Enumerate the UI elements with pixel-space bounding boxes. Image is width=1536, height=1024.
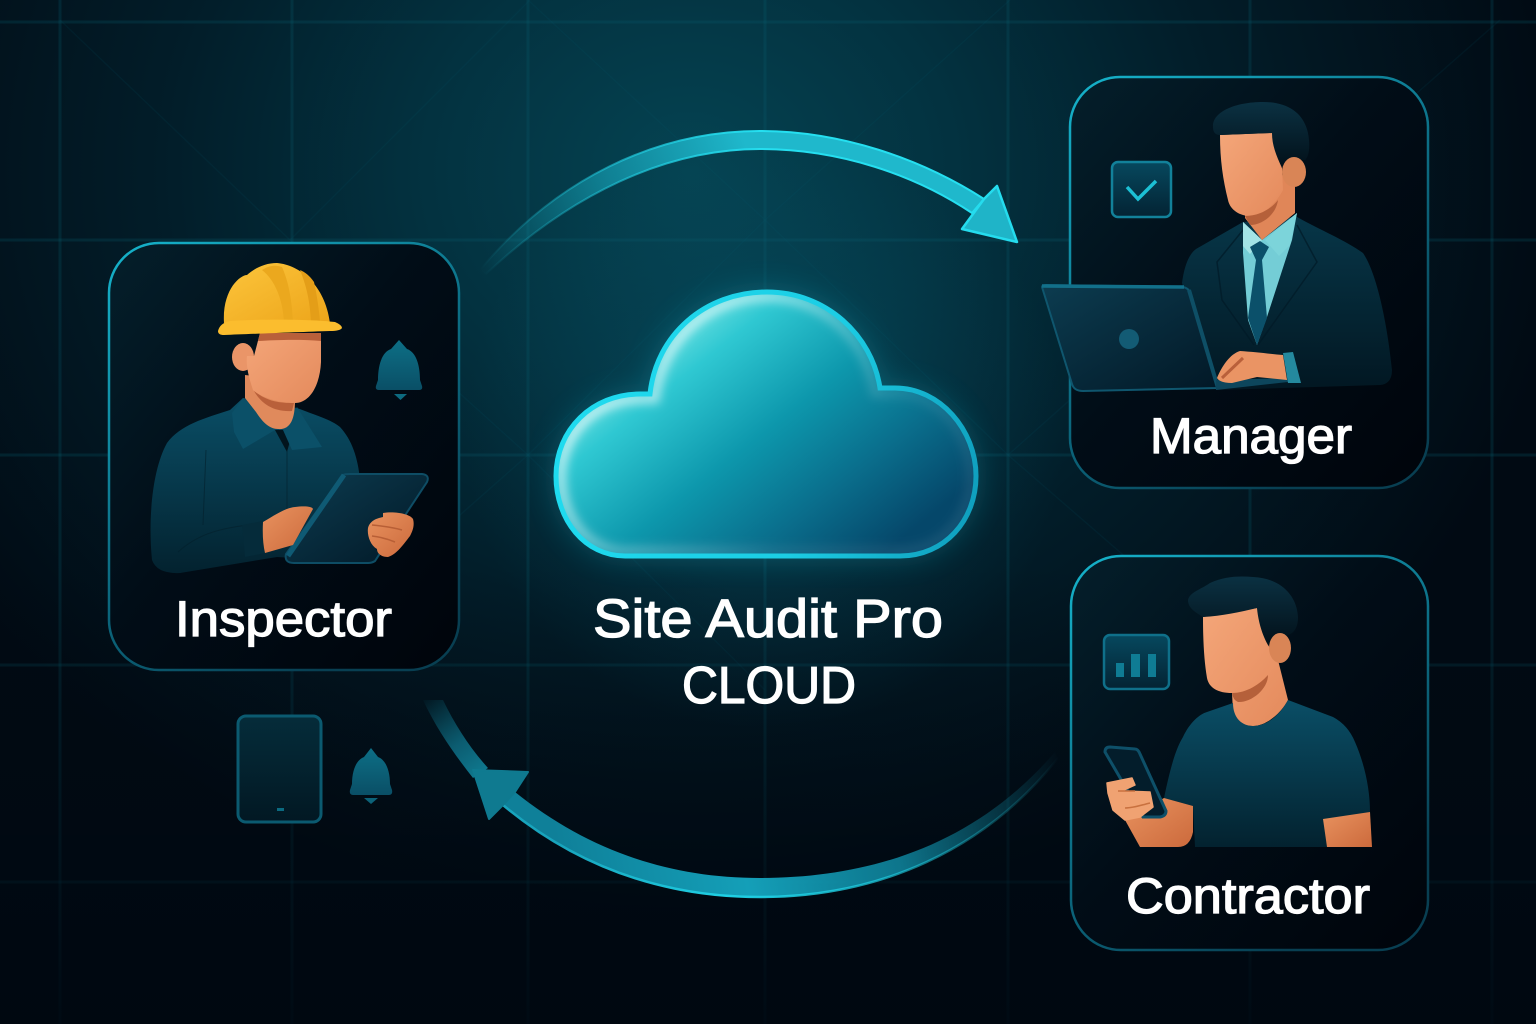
figure: inspector worker: [151, 263, 428, 573]
manager suit: [1182, 217, 1392, 390]
contractor t-shirt: [1164, 700, 1370, 847]
shirt and collar: [1243, 213, 1297, 345]
icon: bar chart tile: [1104, 635, 1169, 689]
worker ear: [232, 343, 254, 371]
manager hand: [1217, 351, 1287, 383]
figure: contractor with phone: [1105, 577, 1372, 847]
arrow: cloud sync from inspector to manager: [480, 131, 1017, 274]
contractor hand: [1107, 778, 1153, 820]
hard hat: [224, 263, 330, 323]
label: Contractor: Contractor: [1126, 868, 1370, 924]
contractor ear: [1269, 633, 1291, 663]
label: Inspector: Inspector: [175, 591, 392, 647]
contractor neck and face: [1203, 608, 1288, 726]
panel: inspector: [109, 243, 459, 670]
worker left hand: [263, 506, 313, 553]
heading: Site Audit Pro CLOUD: Site Audit Pro: [593, 589, 943, 649]
manager cuff: [1283, 352, 1301, 383]
laptop: [1042, 285, 1218, 391]
contractor left arm: [1125, 798, 1193, 847]
label: Manager: Manager: [1150, 408, 1352, 464]
worker shirt: [151, 398, 360, 573]
phone: [1105, 747, 1166, 817]
heading: Site Audit Pro CLOUD: CLOUD: [682, 657, 856, 715]
manager neck: [1245, 165, 1295, 240]
worker right hand: [368, 512, 414, 557]
figure: manager in suit: [1042, 102, 1392, 391]
icon: standalone bell: [350, 748, 392, 804]
worker cuff: [242, 521, 265, 557]
manager ear: [1282, 157, 1306, 187]
heading: Site Audit Pro CLOUD: [593, 589, 943, 715]
manager face: [1220, 133, 1283, 216]
arrow: contractor back to inspector: [423, 700, 1058, 897]
contractor hair: [1188, 577, 1298, 645]
icon: checkbox: [1112, 162, 1171, 217]
panel: manager: [1042, 77, 1428, 488]
worker neck: [245, 375, 295, 429]
tie: [1248, 241, 1269, 345]
contractor right arm: [1323, 812, 1372, 847]
panel: contractor: [1071, 556, 1428, 950]
icon: central cloud: [556, 292, 976, 556]
icon: standalone tablet: [238, 716, 321, 822]
tablet: [286, 474, 428, 563]
manager hair: [1213, 102, 1309, 168]
icon: inspector bell: [376, 340, 422, 400]
worker face: [247, 333, 321, 403]
